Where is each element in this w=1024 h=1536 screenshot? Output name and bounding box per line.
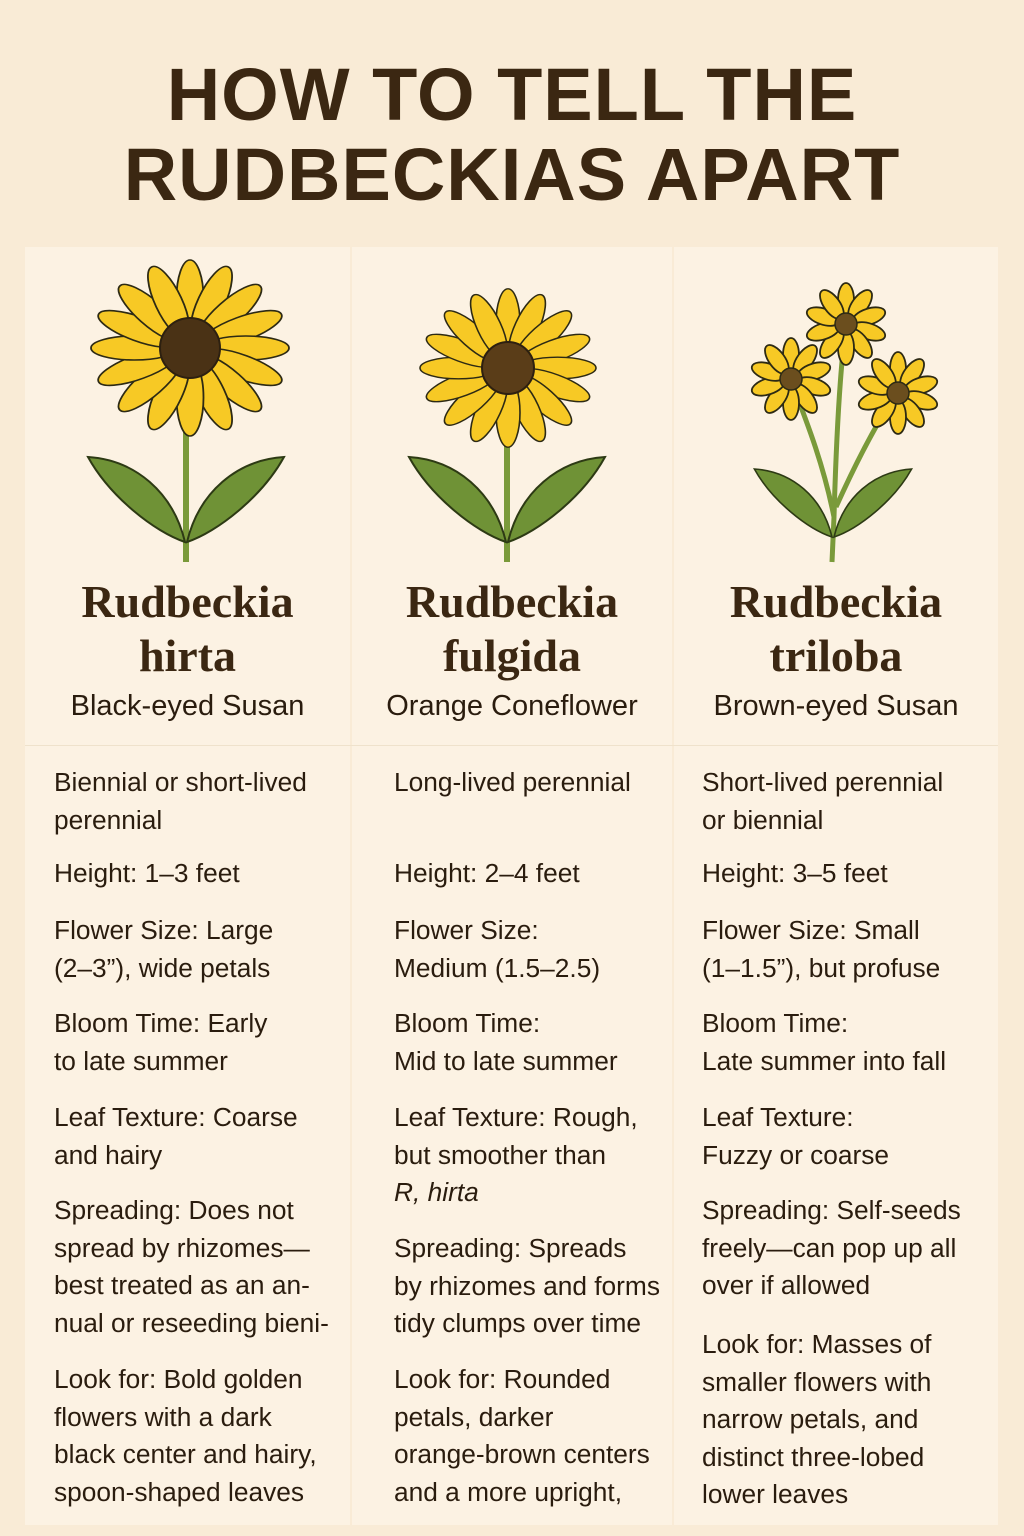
text: fulgida traits: but smoother than	[394, 1140, 606, 1170]
common name: Orange Coneflower	[386, 690, 638, 722]
text: hirta traits: best treated as an an-	[54, 1270, 310, 1300]
text: triloba traits: Look for: Masses of	[702, 1329, 931, 1359]
text: hirta traits: black center and hairy,	[54, 1439, 317, 1469]
text: triloba traits: Fuzzy or coarse	[702, 1140, 889, 1170]
text: triloba traits: Leaf Texture:	[702, 1102, 854, 1132]
text: hirta traits: nual or reseeding bieni-	[54, 1308, 329, 1338]
text: fulgida traits: Leaf Texture: Rough,	[394, 1102, 638, 1132]
text: triloba traits: Short-lived perennial	[702, 767, 943, 797]
text: hirta traits: Flower Size: Large	[54, 915, 273, 945]
text: fulgida traits: Mid to late summer	[394, 1046, 618, 1076]
heading: Rudbeckia hirta: hirta	[139, 630, 236, 681]
text: hirta traits: Look for: Bold golden	[54, 1364, 303, 1394]
text: fulgida traits: and a more upright,	[394, 1476, 622, 1506]
text: triloba traits: Bloom Time:	[702, 1008, 848, 1038]
text: fulgida traits: Spreading: Spreads	[394, 1233, 626, 1263]
text: triloba traits: lower leaves	[702, 1479, 848, 1509]
text: triloba traits: narrow petals, and	[702, 1404, 918, 1434]
text: fulgida traits: Height: 2–4 feet	[394, 858, 580, 888]
text: hirta traits: Height: 1–3 feet	[54, 858, 240, 888]
text: triloba traits: Height: 3–5 feet	[702, 858, 888, 888]
text: triloba traits: Flower Size: Small	[702, 915, 920, 945]
title: HOW TO TELL THE	[167, 53, 857, 136]
text: fulgida traits: Look for: Rounded	[394, 1364, 610, 1394]
text: fulgida traits: Bloom Time:	[394, 1008, 540, 1038]
text: fulgida traits	[394, 767, 660, 1506]
text: triloba traits: Late summer into fall	[702, 1046, 946, 1076]
text: fulgida traits: R, hirta	[394, 1177, 479, 1207]
heading: Rudbeckia hirta	[81, 576, 294, 681]
text: triloba traits: or biennial	[702, 804, 823, 834]
panel: hirta	[25, 247, 350, 1525]
heading: Rudbeckia triloba	[730, 576, 942, 681]
text: fulgida traits: Medium (1.5–2.5)	[394, 952, 600, 982]
text: hirta traits: to late summer	[54, 1046, 228, 1076]
panel: triloba	[674, 247, 998, 1525]
text: hirta traits: spoon-shaped leaves	[54, 1476, 304, 1506]
common name: Black-eyed Susan	[71, 690, 304, 722]
text: hirta traits: (2–3”), wide petals	[54, 952, 270, 982]
text: triloba traits: distinct three-lobed	[702, 1442, 924, 1472]
text: fulgida traits: petals, darker	[394, 1402, 553, 1432]
heading: Rudbeckia hirta: Rudbeckia	[81, 576, 294, 627]
text: hirta traits: Bloom Time: Early	[54, 1008, 267, 1038]
heading: Rudbeckia fulgida	[406, 576, 618, 681]
text: fulgida traits: orange-brown centers	[394, 1439, 650, 1469]
icon: hirta flower	[86, 259, 290, 562]
title	[124, 53, 900, 216]
text: triloba traits: freely—can pop up all	[702, 1232, 956, 1262]
heading: Rudbeckia fulgida: fulgida	[443, 630, 581, 681]
text: hirta traits	[54, 767, 329, 1506]
text: hirta traits: and hairy	[54, 1140, 162, 1170]
text: triloba traits: (1–1.5”), but profuse	[702, 952, 940, 982]
text: triloba traits: Spreading: Self-seeds	[702, 1195, 961, 1225]
icon: triloba flowers	[750, 282, 938, 562]
text: hirta traits: Biennial or short-lived	[54, 767, 307, 797]
text: hirta traits: Spreading: Does not	[54, 1195, 294, 1225]
title: RUDBECKIAS APART	[124, 133, 900, 216]
panel: fulgida	[352, 247, 672, 1525]
text: hirta traits: Leaf Texture: Coarse	[54, 1102, 298, 1132]
heading: Rudbeckia fulgida: Rudbeckia	[406, 576, 618, 627]
heading: Rudbeckia triloba: triloba	[770, 630, 902, 681]
text: hirta traits: flowers with a dark	[54, 1402, 272, 1432]
icon: fulgida flower	[407, 288, 607, 562]
text: fulgida traits: Long-lived perennial	[394, 767, 631, 797]
text: hirta traits: perennial	[54, 804, 162, 834]
text: triloba traits: smaller flowers with	[702, 1366, 931, 1396]
text: triloba traits: over if allowed	[702, 1270, 870, 1300]
text: triloba traits	[702, 767, 961, 1509]
text: fulgida traits: by rhizomes and forms	[394, 1270, 660, 1300]
text: hirta traits: spread by rhizomes—	[54, 1232, 310, 1262]
heading: Rudbeckia triloba: Rudbeckia	[730, 576, 942, 627]
text: fulgida traits: Flower Size:	[394, 915, 539, 945]
text: fulgida traits: tidy clumps over time	[394, 1308, 641, 1338]
common name: Brown-eyed Susan	[713, 690, 959, 722]
